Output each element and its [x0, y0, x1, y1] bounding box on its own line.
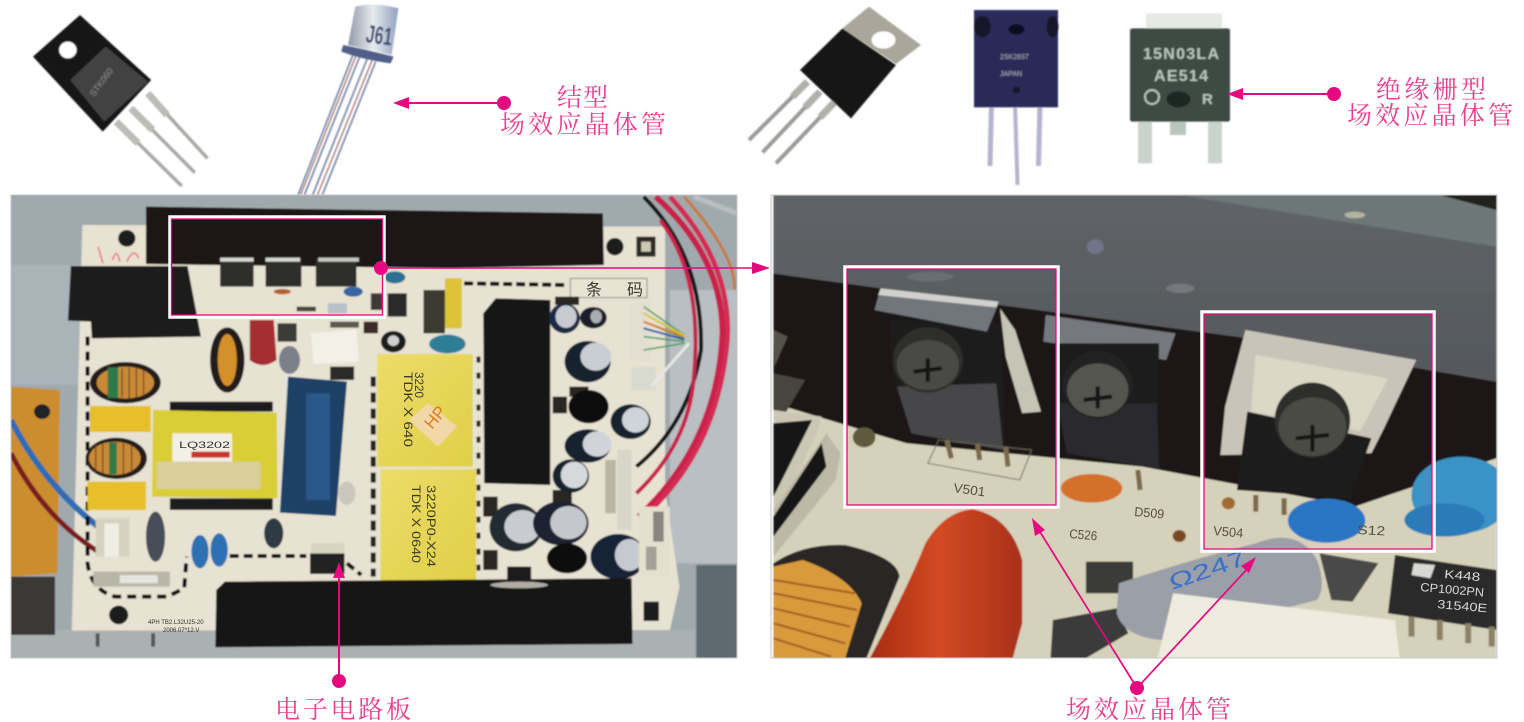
long connector, right side [617, 450, 632, 530]
panel: close-up of FETs [773, 195, 1511, 658]
coil bottom-left [773, 545, 899, 658]
photo: TO-220F junction FET [33, 15, 207, 186]
low left components [93, 512, 345, 647]
close-up silk and part text [953, 480, 1488, 615]
panel frame: close-up [771, 195, 1497, 658]
coil lower [86, 438, 147, 479]
arrow: board to close-up [374, 261, 770, 275]
grey resistor [1050, 538, 1378, 658]
panel: circuit board photo [11, 195, 737, 658]
photo: DPAK insulated gate FET [1130, 13, 1230, 163]
label: insulated gate FET: 场效应晶体管 [1347, 102, 1513, 130]
red film capacitor [870, 509, 1022, 658]
left transformer [68, 266, 201, 338]
barcode sticker [639, 507, 670, 577]
board silk text: LQ3202 [179, 440, 230, 450]
IC K448 [1388, 555, 1496, 647]
board silk text: 3220 [412, 372, 426, 398]
wires blue and dark red [11, 420, 98, 527]
white block [1158, 593, 1400, 658]
photo: TO-220 insulated gate FET [749, 7, 921, 163]
board silk text: 4PH TB2.L32U25-20 [148, 620, 204, 626]
red and black cables [636, 197, 737, 517]
close-up silk and part text: 31540E [1437, 597, 1488, 615]
screw, left panel [34, 404, 50, 419]
board silk text: TDK X 640 [401, 372, 415, 447]
coil upper [90, 362, 161, 403]
orange ceramic capacitor [1061, 474, 1122, 503]
board silk text: 3220P0-X24 [424, 485, 438, 567]
photo: TO-3P insulated gate FET: JAPAN [1000, 71, 1022, 78]
board silk text: 2006.07*12.V [163, 628, 199, 634]
board silk text: TDK X 0640 [409, 485, 423, 563]
label: insulated gate FET [1347, 76, 1513, 130]
long black module [483, 298, 550, 485]
panel frame: circuit board [11, 195, 737, 658]
close-up silk and part text: D509 [1134, 504, 1165, 522]
multi-colour connector [629, 302, 689, 390]
close-up silk and part text: Ω247 [1165, 545, 1249, 595]
transistor V504 [1173, 330, 1416, 542]
photo: TO-220F junction FET: STK060 [88, 66, 115, 98]
label: junction FET: 场效应晶体管 [500, 111, 666, 139]
dashed PCB outline [88, 337, 187, 597]
close-up silk and part text: C526 [1069, 526, 1098, 543]
yellow film capacitors [377, 354, 476, 583]
photo: TO-18 metal can junction FET: J61 [364, 21, 394, 52]
grey heat sink top [773, 195, 1496, 382]
close-up silk and part text: S12 [1357, 522, 1386, 538]
photo: TO-3P insulated gate FET: 2SK2837 [1000, 54, 1029, 61]
label: junction FET [500, 84, 666, 139]
highlight box: left FET [845, 267, 1058, 507]
board silk text [148, 281, 643, 634]
label: junction FET: 结型 [557, 84, 608, 112]
left stacked components [773, 330, 841, 557]
transistor middle [1043, 315, 1176, 490]
printed circuit board [72, 225, 679, 631]
blue electrolytic capacitor [280, 377, 347, 516]
black shadow band [773, 273, 1496, 507]
label: insulated gate FET: 绝缘栅型 [1376, 76, 1486, 104]
barcode plate [570, 278, 647, 298]
yellow blocks [90, 406, 151, 432]
blue capacitors [1288, 457, 1511, 543]
arrow: circuit board pointer [332, 562, 346, 688]
photo: DPAK insulated gate FET: R [1202, 91, 1213, 108]
photo: TO-3P insulated gate FET [974, 10, 1058, 185]
white block [311, 329, 359, 364]
main transformer [170, 402, 273, 412]
mounting screws [109, 230, 659, 624]
highlight box on board [170, 217, 384, 317]
photo: DPAK insulated gate FET: 15N03LA [1143, 46, 1219, 63]
electrolytic capacitors [490, 303, 651, 579]
transistor V501 [853, 288, 1041, 480]
close-up silk and part text: CP1002PN [1420, 580, 1485, 600]
highlight box: right FET [1202, 312, 1434, 551]
top heat sink [146, 207, 604, 268]
arrows: FET pointers [1032, 518, 1256, 695]
photo: TO-18 metal can junction FET [298, 5, 398, 195]
close-up silk and part text: V501 [953, 480, 986, 499]
close-up silk and part text: K448 [1444, 567, 1481, 584]
board silk text: HP [421, 402, 450, 433]
arrow: insulated gate FET pointer [1227, 87, 1341, 101]
pen mark on board [98, 247, 139, 263]
small parts near top [445, 278, 462, 328]
close-up silk and part text: V504 [1213, 523, 1244, 541]
photo: DPAK insulated gate FET: AE514 [1154, 68, 1208, 85]
left orange panel [11, 387, 60, 577]
arrow: junction FET pointer [393, 96, 511, 110]
bottom black heat sink [215, 578, 633, 647]
transistors under heat sink [220, 258, 405, 313]
parts clutter right of module [483, 297, 616, 570]
board silk text: 条 码 [586, 281, 643, 299]
red capacitor and coil [250, 320, 277, 365]
